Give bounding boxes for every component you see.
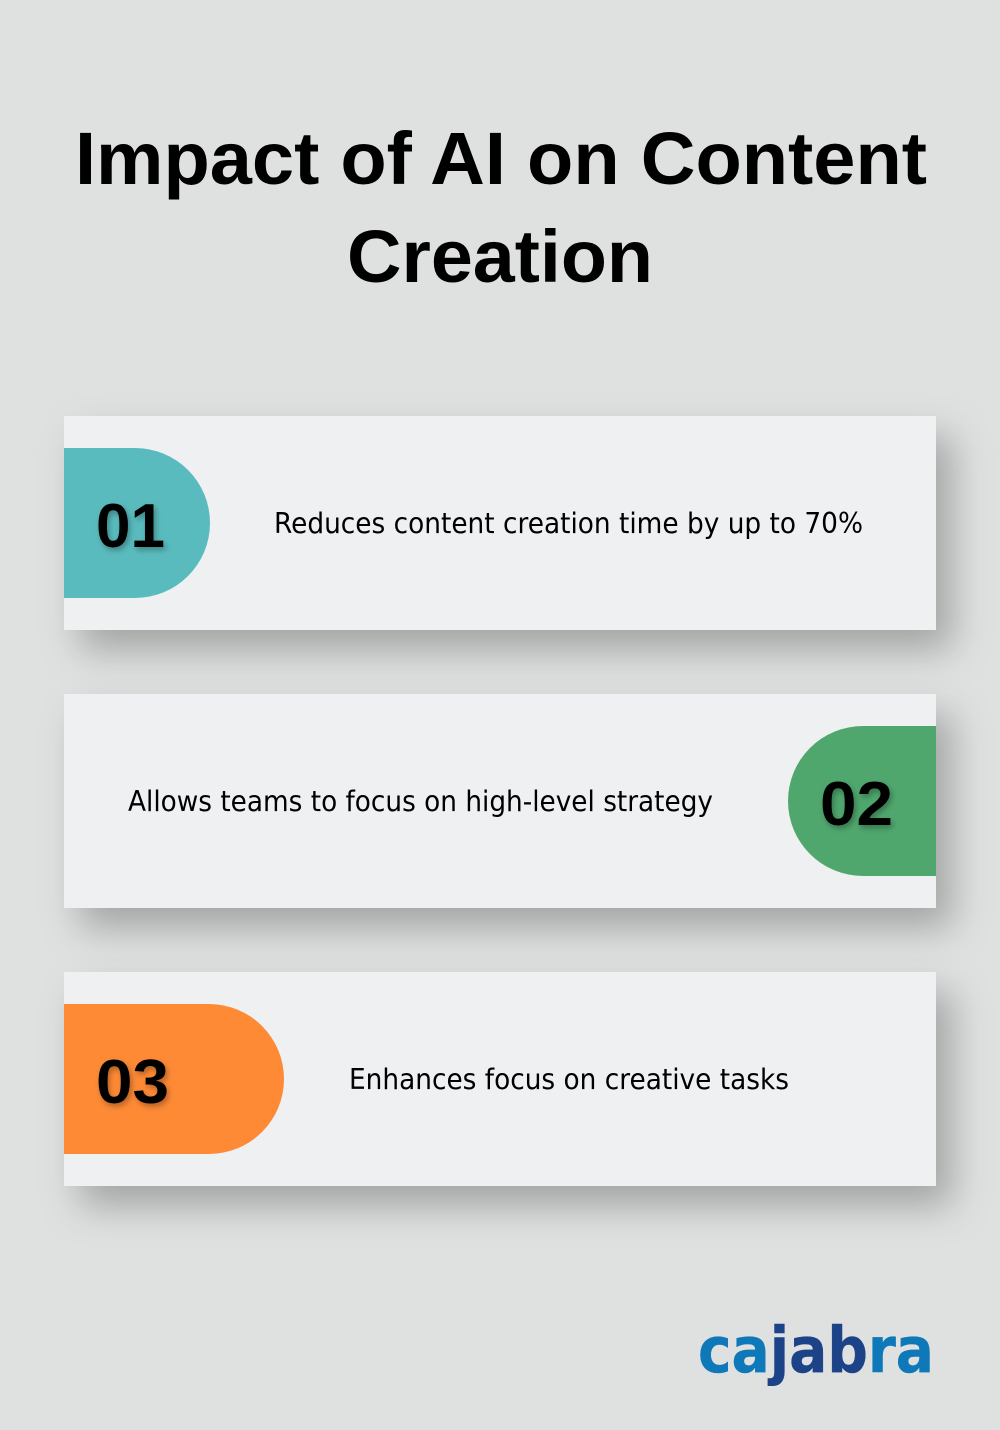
- title: Impact of AI on Content: [75, 117, 927, 200]
- panel: card 03: [64, 972, 936, 1186]
- panel: card 02: [64, 694, 936, 908]
- badge: 02: 02: [820, 770, 893, 839]
- badge: 01: [64, 448, 210, 598]
- text: card 01: Reduces content creation time by up to 70%: [274, 507, 863, 540]
- badge: 03: [64, 1004, 284, 1154]
- panel: card 01: [64, 416, 936, 630]
- title: Creation: [347, 215, 653, 298]
- text: card 02: Allows teams to focus on high-level strategy: [128, 785, 713, 818]
- badge: 02: [788, 726, 936, 876]
- badge: 01: 01: [96, 492, 165, 561]
- badge: 03: 03: [96, 1048, 169, 1117]
- title: [75, 117, 927, 298]
- text: card 03: Enhances focus on creative tasks: [349, 1063, 789, 1096]
- logo: cajabra: cajabra: [698, 1314, 934, 1387]
